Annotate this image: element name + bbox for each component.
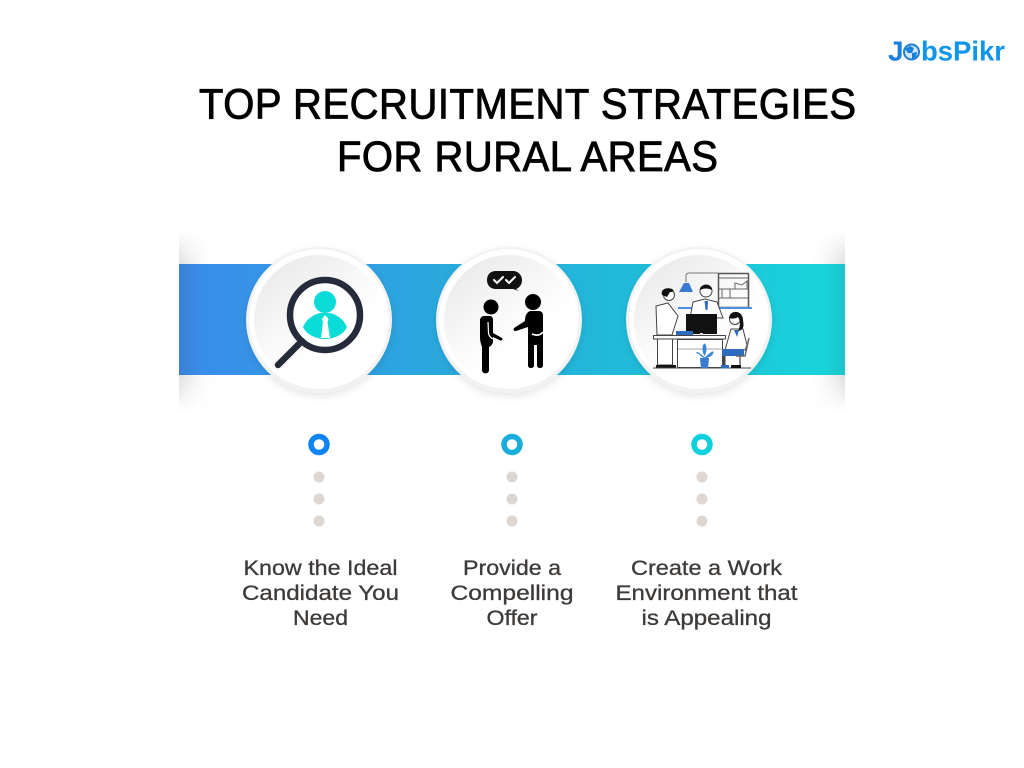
label: create a work environment: Create a Work <box>631 557 783 580</box>
timeline markers: column 3 <box>694 436 710 526</box>
label: know the ideal candidate: Need <box>293 607 348 630</box>
label: create a work environment: is Appealing <box>642 607 772 630</box>
monitor <box>676 314 717 336</box>
icon: left person <box>480 300 502 373</box>
label: provide a compelling offer: Provide a <box>463 557 561 580</box>
label: provide a compelling offer: Compelling <box>450 582 574 605</box>
icon: logo globe <box>904 44 919 60</box>
label: know the ideal candidate <box>242 557 399 630</box>
title: FOR RURAL AREAS <box>337 133 718 180</box>
gradient banner <box>179 230 845 413</box>
label: create a work environment: Environment that <box>616 582 798 605</box>
label: know the ideal candidate: Know the Ideal <box>244 557 398 580</box>
label: provide a compelling offer: Offer <box>486 607 538 630</box>
person: seated woman <box>721 312 749 368</box>
logo: JobsPikr: bsPikr <box>921 36 1005 66</box>
label: know the ideal candidate: Candidate You <box>242 582 399 605</box>
logo: JobsPikr: J <box>888 36 904 66</box>
icon panel: magnifier with candidate <box>246 247 392 393</box>
title: TOP RECRUITMENT STRATEGIES <box>199 80 856 128</box>
plant <box>697 344 713 368</box>
icon: magnifying glass <box>278 280 360 365</box>
timeline markers: column 1 <box>311 436 327 526</box>
timeline markers: column 2 <box>504 436 520 526</box>
label: create a work environment <box>616 557 798 630</box>
icon: speech bubble with checks <box>487 271 522 291</box>
icon: right person <box>514 294 543 368</box>
desk <box>653 336 751 368</box>
icon panel: two people talking <box>436 247 582 393</box>
icon panel: office team <box>626 247 772 393</box>
person: centre man <box>690 285 723 318</box>
label: provide a compelling offer <box>450 557 574 630</box>
title <box>199 80 856 180</box>
icon: office illustration <box>653 273 752 368</box>
person: left man <box>656 288 678 368</box>
